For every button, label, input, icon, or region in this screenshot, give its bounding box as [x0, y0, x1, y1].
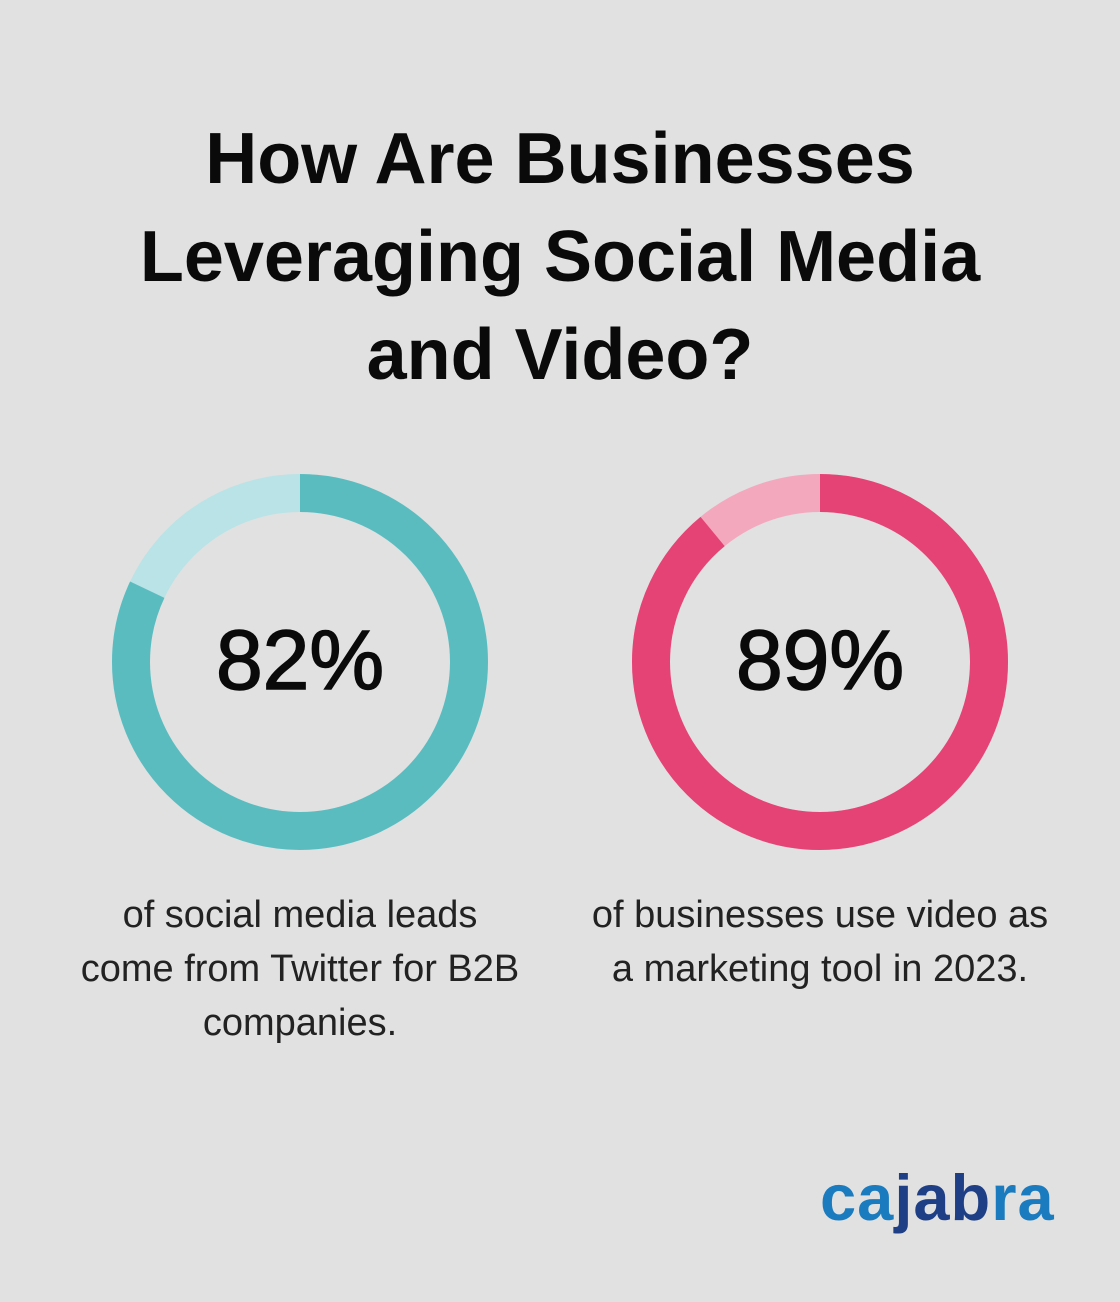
- caption: 82%: of social media leads: [123, 894, 477, 936]
- title: [140, 119, 981, 395]
- title: Leveraging Social Media: [140, 217, 980, 297]
- caption: 82%: come from Twitter for B2B: [81, 948, 519, 990]
- caption: 82%: [81, 894, 519, 1044]
- title: and Video?: [367, 315, 753, 395]
- caption: 89%: of businesses use video as: [592, 894, 1048, 936]
- caption: 89%: a marketing tool in 2023.: [612, 948, 1028, 990]
- title: How Are Businesses: [205, 119, 915, 199]
- caption: 82%: companies.: [203, 1002, 397, 1044]
- caption: 89%: [592, 894, 1048, 990]
- logo: cajabra: cajabra: [820, 1161, 1055, 1234]
- donut chart: 89%: 89%: [736, 613, 904, 707]
- donut chart: 82%: 82%: [216, 613, 384, 707]
